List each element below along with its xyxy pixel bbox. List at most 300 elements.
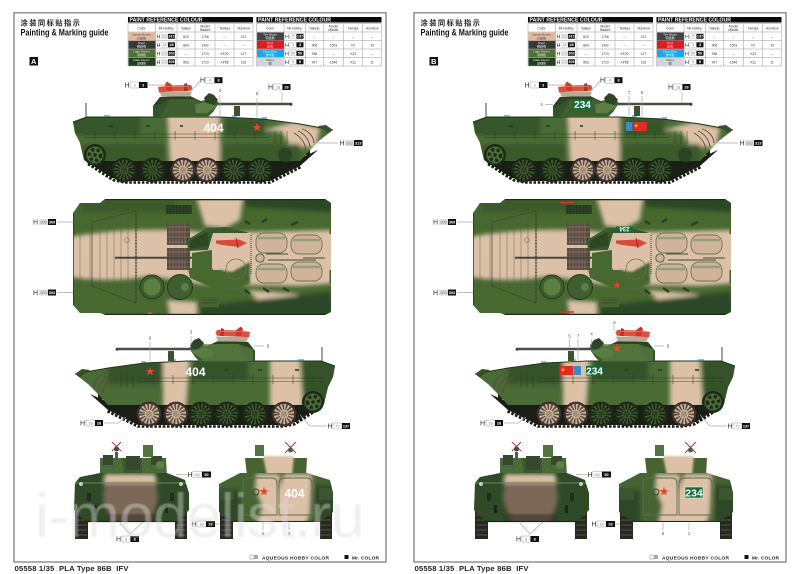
paint reference tables: 938 — [712, 52, 717, 56]
marking: unit emblem — [574, 366, 581, 375]
paint reference tables: X11 — [350, 60, 356, 64]
paint reference tables: Master — [328, 28, 340, 32]
paint reference tables: – — [333, 35, 335, 39]
paint reference tables: 313 — [568, 35, 575, 39]
callouts: side view: 3 — [533, 84, 536, 88]
callouts: side view: 3 — [542, 84, 544, 88]
paint reference tables: 893 — [583, 60, 589, 64]
paint reference tables: H — [156, 52, 160, 58]
paint reference tables: 沙棕色 — [537, 35, 546, 40]
version badge A — [30, 57, 38, 66]
paint reference tables: Tire Black — [263, 32, 277, 36]
paint reference tables: 1713 — [601, 52, 609, 56]
callouts: left side view: 4 — [590, 332, 593, 336]
marking: green number 234: 234 — [586, 366, 603, 378]
legend: Mr. Color: Mr. COLOR — [752, 555, 780, 561]
callouts: rear view — [262, 522, 291, 536]
callouts: front view: 8 — [534, 538, 536, 542]
paint reference tables: – — [352, 35, 354, 39]
paint reference tables: H — [685, 60, 689, 66]
paint reference tables: 938 — [312, 52, 317, 56]
paint reference tables: Humbrol — [366, 26, 379, 30]
paint reference tables: H — [156, 43, 160, 49]
paint reference tables: 8 — [299, 60, 301, 64]
paint reference tables: 红色 — [667, 44, 673, 49]
paint reference tables: X11 — [750, 60, 756, 64]
callouts: front view: 8 — [125, 538, 127, 542]
paint reference tables: Silver — [666, 58, 674, 62]
paint reference tables: 1546 — [330, 60, 337, 64]
paint reference tables: X23 — [350, 52, 356, 56]
paint reference tables: 1402 — [201, 44, 209, 48]
vehicle B: right side view — [470, 82, 740, 182]
marking: green number 234: 234 — [685, 488, 703, 500]
paint reference tables: 沙棕色 — [137, 35, 146, 40]
paint reference tables: H — [685, 34, 689, 40]
callouts: front view: H — [516, 536, 521, 544]
paint reference tables: Clear Blue — [263, 50, 277, 54]
callouts: side view: H — [200, 78, 205, 84]
paint reference tables: XF20 — [620, 52, 629, 56]
callouts: front view: H — [592, 522, 597, 528]
paint reference tables: – — [371, 52, 373, 56]
marking: number 404: 404 — [203, 121, 224, 135]
paint reference tables: 313 — [168, 35, 175, 39]
callouts: rear view: 3 — [288, 531, 291, 536]
version badge B: B — [431, 57, 437, 66]
paint reference tables: 3 — [692, 43, 694, 47]
callouts: side view: H — [740, 140, 745, 148]
paint reference tables: Color — [266, 26, 275, 30]
callouts: top view: 309 — [440, 220, 447, 224]
paint reference tables: XF58 — [620, 60, 629, 64]
paint reference tables: XF20 — [220, 52, 229, 56]
callouts: top view: H — [33, 290, 38, 297]
paint reference tables: Light Green — [133, 50, 150, 54]
paint reference tables: Mr.Hobby — [287, 26, 302, 30]
callouts: left side view: 6 — [149, 336, 152, 340]
paint reference tables: 轮胎黑 — [265, 35, 275, 40]
vehicle B: rear view — [615, 442, 737, 539]
paint reference tables: 819 — [583, 35, 589, 39]
callouts: top view: H — [433, 290, 438, 297]
callouts: top view: 303 — [40, 291, 47, 295]
paint reference tables: – — [243, 44, 245, 48]
callouts: left side view — [80, 330, 350, 430]
paint reference tables: 50 — [298, 52, 302, 56]
paint reference tables: – — [733, 35, 735, 39]
paint reference tables: – — [185, 52, 187, 56]
callouts: front view: 28 — [608, 522, 613, 526]
paint reference tables: 浅绿色 — [537, 52, 546, 57]
paint reference tables: 钢铁色 — [137, 44, 146, 49]
paint reference tables: 深绿色 — [537, 61, 546, 66]
paint reference tables: 303 — [568, 52, 575, 56]
callouts: side view: 3 — [219, 88, 222, 93]
callouts: side view: 28 — [684, 86, 689, 90]
paint reference tables: – — [585, 52, 587, 56]
paint reference tables: 50 — [691, 52, 695, 56]
paint reference tables: – — [771, 52, 773, 56]
callouts: left side view: 6 — [613, 320, 616, 325]
callouts: top view — [33, 219, 73, 297]
paint reference tables: – — [314, 35, 316, 39]
paint reference tables: 309 — [168, 60, 175, 64]
paint reference tables: Color — [537, 26, 546, 30]
paint reference tables: Red — [267, 41, 273, 45]
paint reference tables: Model — [729, 24, 738, 28]
paint reference tables: 18 — [562, 43, 567, 47]
marking: upside-down number 234 — [616, 225, 633, 232]
paint reference tables: 28 — [569, 43, 574, 47]
paint reference tables: Tamiya — [619, 26, 630, 30]
paint reference tables: 轮胎黑 — [665, 35, 675, 40]
marking: red star — [145, 367, 155, 375]
callouts: top view: H — [433, 220, 438, 226]
heading: Chinese title: 涂装同标贴指示 — [20, 19, 81, 28]
callouts: front view: 18 — [599, 522, 604, 526]
paint reference tables: Master — [600, 28, 611, 32]
marking: flag — [634, 122, 647, 131]
callouts: side view: H — [600, 78, 605, 84]
callouts: side view: 8 — [217, 79, 220, 83]
paint reference tables: Sandy Brown — [132, 32, 151, 36]
callouts: front view: 18 — [199, 522, 204, 526]
callouts: front view: 50 — [204, 473, 209, 477]
paint reference tables: 997 — [312, 60, 317, 64]
paint reference tables: 11 — [370, 60, 374, 64]
callouts: side view: 313 — [755, 142, 761, 146]
paint reference tables: – — [224, 44, 226, 48]
callouts: left side view: H — [328, 424, 333, 430]
paint reference tables: 浅绿色 — [137, 52, 146, 57]
callouts: rear view — [662, 522, 691, 536]
paint reference tables: H — [685, 52, 689, 58]
paint reference tables: Master — [200, 28, 211, 32]
heading: Painting and Marking guide: Painting & Marking guide — [420, 28, 508, 38]
callouts: left side view: 77 — [335, 424, 340, 428]
paint reference tables: H — [556, 60, 560, 66]
paint reference tables — [528, 17, 782, 66]
callouts: side view: 6 — [256, 91, 259, 96]
paint reference tables: 1546 — [730, 60, 737, 64]
paint reference tables: – — [643, 44, 645, 48]
callouts: side view: H — [340, 140, 345, 148]
paint reference tables: 121 — [241, 35, 246, 39]
paint reference tables: 908 — [312, 44, 317, 48]
paint reference tables: PAINT REFERENCE COLOUR — [258, 18, 331, 24]
paint reference tables: 1710 — [201, 60, 209, 64]
paint reference tables: Master — [728, 28, 740, 32]
paint reference tables: Dark Green — [134, 58, 150, 62]
callouts: side view: H — [268, 84, 273, 92]
paint reference tables: Model — [600, 24, 610, 28]
paint reference tables — [128, 17, 382, 66]
paint reference tables: PAINT REFERENCE COLOUR — [130, 18, 203, 24]
paint reference tables: H — [285, 52, 289, 58]
paint reference tables: 77 — [691, 35, 695, 39]
callouts: front view: H — [588, 472, 593, 479]
callouts: side view: 4 — [540, 102, 543, 107]
callouts: side view: 3 — [142, 84, 144, 88]
paint reference tables: XF58 — [220, 60, 229, 64]
callouts: top view: 309 — [40, 220, 47, 224]
vehicle A: top view — [70, 196, 340, 318]
paint reference tables: 50 — [698, 52, 702, 56]
callouts: side view: 5 — [641, 90, 644, 95]
vehicle A: rear view — [215, 442, 337, 539]
footer title: 05558 1/35 PLA Type 86B IFV — [14, 564, 129, 573]
callouts: left side view: 7 — [577, 334, 580, 338]
callouts: front view — [516, 472, 626, 544]
heading: Chinese title: 涂装同标贴指示 — [420, 19, 481, 28]
vehicle A: left side view — [68, 326, 338, 426]
callouts: left side view: H — [728, 424, 733, 430]
paint reference tables: Humbrol — [766, 26, 779, 30]
callouts: rear view: 6 — [262, 531, 265, 536]
callouts: left side view: 3 — [190, 330, 193, 334]
paint reference tables: 深绿色 — [137, 61, 146, 66]
callouts: side view: H — [524, 82, 530, 90]
callouts: side view: 313 — [355, 142, 361, 146]
callouts: front view: H — [116, 536, 121, 544]
callouts: side view: H — [668, 84, 673, 92]
marking: red star — [659, 487, 669, 495]
vehicle B: left side view — [468, 326, 738, 426]
callouts: rear view: 6 — [662, 531, 665, 536]
paint reference tables: H — [156, 60, 160, 66]
paint reference tables: 银 — [668, 61, 672, 66]
callouts: side view: 313 — [746, 142, 753, 146]
callouts: front view: 28 — [208, 522, 213, 526]
callouts: side view — [524, 77, 762, 148]
paint reference tables: – — [752, 35, 754, 39]
paint reference tables: 钢铁色 — [537, 44, 546, 49]
callouts: side view: 8 — [609, 79, 611, 83]
paint reference tables: 303 — [168, 52, 175, 56]
marking: flags on top edges — [560, 202, 574, 312]
callouts: left side view: 28 — [97, 422, 101, 426]
paint reference tables: Color — [666, 26, 675, 30]
paint reference tables: – — [333, 52, 335, 56]
paint reference tables: Steel — [138, 41, 145, 45]
paint reference tables: 1710 — [601, 60, 609, 64]
callouts: rear view: 1 — [688, 531, 691, 536]
paint reference tables: X7 — [351, 44, 355, 48]
paint reference tables: 18 — [162, 43, 167, 47]
panel B: sheet frame — [414, 13, 786, 562]
vehicle A: right side view — [70, 82, 340, 182]
callouts: side view — [124, 77, 362, 148]
callouts: left side view: H — [480, 420, 485, 428]
callouts: top view: 309 — [49, 220, 55, 224]
paint reference tables: Tire Black — [663, 32, 677, 36]
paint reference tables: 19 — [370, 44, 374, 48]
marking: red star — [252, 123, 262, 131]
paint reference tables: 28 — [169, 43, 174, 47]
paint reference tables: H — [156, 34, 160, 40]
heading: Painting and Marking guide: Painting & Marking guide — [20, 28, 108, 38]
paint reference tables: 红色 — [267, 44, 273, 49]
callouts: front view — [116, 472, 226, 544]
vehicle B: top view — [470, 196, 740, 318]
paint reference tables: 透明蓝 — [265, 52, 275, 57]
callouts: front view: 8 — [134, 538, 136, 542]
version badge B — [430, 57, 438, 66]
marking: flag — [560, 366, 574, 375]
paint reference tables: X23 — [750, 52, 756, 56]
paint reference tables: 77 — [291, 35, 295, 39]
callouts: top view: H — [33, 220, 38, 226]
paint reference tables: Silver — [266, 58, 274, 62]
paint reference tables: 3 — [292, 43, 294, 47]
paint reference tables: 137 — [297, 35, 303, 39]
callouts: side view: 18 — [276, 86, 280, 90]
paint reference tables: – — [771, 35, 773, 39]
paint reference tables: 50 — [291, 52, 295, 56]
paint reference tables: – — [624, 35, 626, 39]
marking: number 404: 404 — [185, 365, 206, 379]
legend: Mr. Color — [344, 555, 380, 561]
paint reference tables: 1503 — [730, 44, 737, 48]
legend: aqueous hobby color: AQUEOUS HOBBY COLOR — [262, 555, 330, 561]
paint reference tables: 1706 — [601, 35, 609, 39]
legend: aqueous hobby color — [250, 555, 330, 561]
paint reference tables: 3 — [699, 43, 701, 47]
callouts: left side view: 77 — [735, 424, 740, 428]
callouts: top view: 303 — [49, 291, 55, 295]
callouts: top view: 303 — [449, 291, 455, 295]
callouts: left side view: 8 — [267, 344, 270, 349]
callouts: front view: H — [192, 522, 197, 528]
paint reference tables: H — [285, 34, 289, 40]
paint reference tables: Tamiya — [348, 26, 358, 30]
paint reference tables: 透明蓝 — [665, 52, 675, 57]
paint reference tables: Humbrol — [637, 26, 650, 30]
paint reference tables: 19 — [770, 44, 774, 48]
paint reference tables: H — [285, 60, 289, 66]
callouts: front view: 50 — [195, 473, 200, 477]
paint reference tables: 997 — [712, 60, 717, 64]
marking: green number 234: 234 — [574, 100, 591, 111]
paint reference tables: H — [685, 43, 689, 49]
paint reference tables: Tamiya — [748, 26, 758, 30]
panel A: sheet frame — [14, 13, 386, 562]
paint reference tables: Vallejo — [710, 26, 720, 30]
paint reference tables: 1713 — [201, 52, 209, 56]
paint reference tables: – — [733, 52, 735, 56]
version badge A: A — [31, 57, 37, 66]
callouts: left side view: 5 — [568, 334, 571, 338]
paint reference tables: 银 — [268, 61, 272, 66]
paint reference tables: 121 — [641, 35, 646, 39]
legend: aqueous hobby color: AQUEOUS HOBBY COLOR — [662, 555, 730, 561]
callouts: front view: 50 — [595, 473, 600, 477]
paint reference tables: Vallejo — [581, 26, 591, 30]
paint reference tables: Model — [200, 24, 210, 28]
paint reference tables: 908 — [712, 44, 717, 48]
paint reference tables: Humbrol — [237, 26, 250, 30]
marking: upside-down number 234: 234 — [619, 225, 630, 231]
marking: number 404: 404 — [284, 486, 305, 500]
paint reference tables: Clear Blue — [663, 50, 677, 54]
callouts: left side view: 137 — [743, 424, 749, 428]
paint reference tables: Vallejo — [310, 26, 320, 30]
watermark: i-modelist.ru — [35, 482, 365, 551]
paint reference tables: 864 — [583, 44, 589, 48]
paint reference tables: Mr.Hobby — [559, 26, 574, 30]
legend: Mr. Color — [744, 555, 780, 561]
paint reference tables: PAINT REFERENCE COLOUR — [530, 18, 603, 24]
paint reference tables: PAINT REFERENCE COLOUR — [658, 18, 731, 24]
paint reference tables: Light Green — [533, 50, 550, 54]
paint reference tables: 1402 — [601, 44, 609, 48]
paint reference tables: 117 — [641, 52, 646, 56]
panel A — [14, 17, 382, 573]
callouts: side view: 28 — [284, 86, 289, 90]
callouts: top view: 309 — [449, 220, 455, 224]
paint reference tables: – — [714, 35, 716, 39]
legend: Mr. Color: Mr. COLOR — [352, 555, 380, 561]
paint reference tables: 137 — [697, 35, 703, 39]
callouts: left side view: 18 — [488, 422, 493, 426]
paint reference tables: Dark Green — [534, 58, 550, 62]
paint reference tables: Steel — [538, 41, 545, 45]
vehicle B: front view — [470, 442, 595, 539]
paint reference tables: H — [556, 34, 560, 40]
callouts: left side view — [480, 320, 750, 430]
callouts: left side view: 18 — [88, 422, 93, 426]
legend: aqueous hobby color — [650, 555, 730, 561]
paint reference tables: Color — [137, 26, 146, 30]
paint reference tables: Vallejo — [181, 26, 191, 30]
callouts: top view: 303 — [440, 291, 447, 295]
paint reference tables: – — [371, 35, 373, 39]
paint reference tables: 3 — [299, 43, 301, 47]
callouts: side view: 8 — [209, 79, 211, 83]
paint reference tables: H — [556, 52, 560, 58]
callouts: side view: 8 — [617, 79, 620, 83]
paint reference tables: X7 — [751, 44, 755, 48]
callouts: front view: 8 — [525, 538, 527, 542]
footer title: 05558 1/35 PLA Type 86B IFV — [414, 564, 529, 573]
paint reference tables: 117 — [241, 52, 246, 56]
paint reference tables: 116 — [641, 60, 646, 64]
callouts: left side view: 28 — [497, 422, 501, 426]
panel B — [414, 17, 782, 573]
callouts: left side view: 8 — [667, 344, 670, 349]
paint reference tables: 8 — [692, 60, 694, 64]
marking: red star — [259, 487, 269, 495]
paint reference tables: 893 — [183, 60, 189, 64]
paint reference tables: Mr.Hobby — [159, 26, 174, 30]
marking: star — [613, 282, 621, 288]
paint reference tables: Red — [667, 41, 673, 45]
paint reference tables: – — [624, 44, 626, 48]
callouts: front view: H — [188, 472, 193, 479]
paint reference tables: H — [556, 43, 560, 49]
paint reference tables: 8 — [699, 60, 701, 64]
callouts: side view: 7 — [628, 90, 631, 95]
callouts: side view: H — [124, 82, 130, 90]
paint reference tables: 1706 — [201, 35, 209, 39]
marking: unit emblem — [626, 122, 632, 131]
paint reference tables: 8 — [292, 60, 294, 64]
paint reference tables: Mr.Hobby — [687, 26, 702, 30]
paint reference tables: H — [285, 43, 289, 49]
marking: turret star — [612, 344, 622, 352]
vehicle A: front view — [70, 442, 195, 539]
